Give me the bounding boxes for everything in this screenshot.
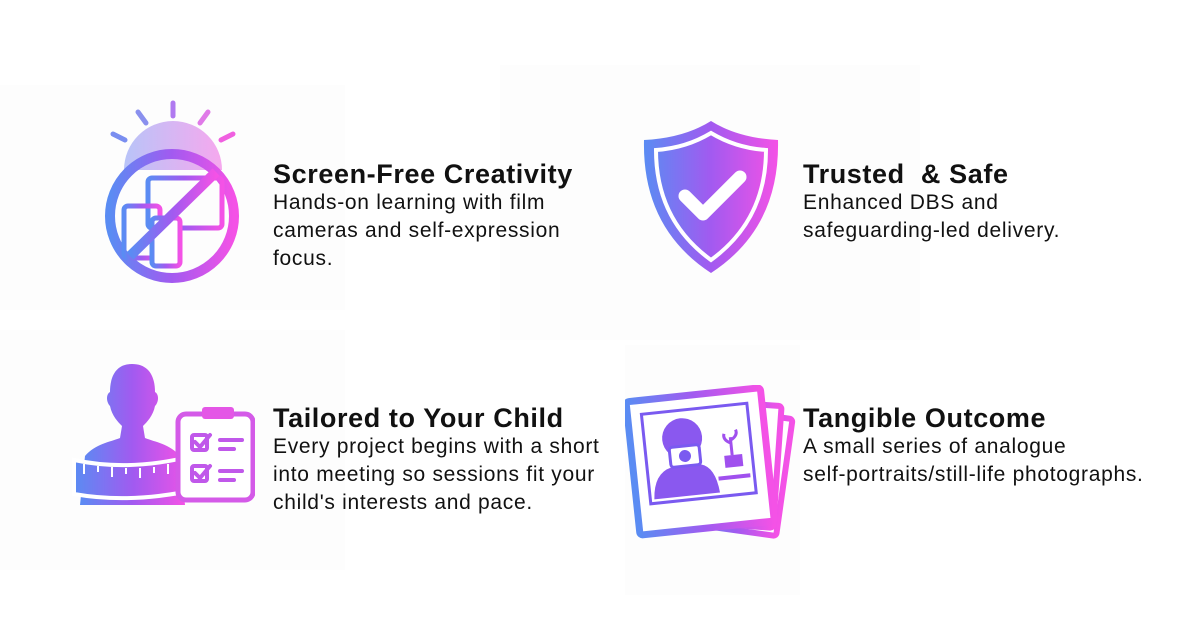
text: trusted: Enhanced DBS and	[803, 191, 999, 214]
text: tailored: child's interests and pace.	[273, 491, 533, 514]
text: tailored: Every project begins with a short	[273, 435, 600, 458]
text: trusted	[803, 191, 1060, 242]
text: trusted: safeguarding-led delivery.	[803, 219, 1060, 242]
icon: shield	[644, 121, 778, 273]
text: screen-free	[273, 191, 560, 270]
text: screen-free: Hands-on learning with film	[273, 191, 545, 214]
text: screen-free: cameras and self-expression	[273, 219, 560, 242]
heading: tangible: Tangible Outcome	[803, 403, 1046, 433]
text: tailored	[273, 435, 600, 514]
icon: child measure and clipboard	[76, 364, 255, 505]
heading: tailored: Tailored to Your Child	[273, 403, 564, 433]
text: tailored: into meeting so sessions fit your	[273, 463, 595, 486]
heading: trusted: Trusted & Safe	[803, 159, 1009, 189]
text: tangible: self-portraits/still-life photographs.	[803, 463, 1144, 486]
icon: no screens	[105, 100, 239, 283]
icon: photographs	[625, 385, 796, 539]
text: tangible	[803, 435, 1144, 486]
heading: screen-free: Screen-Free Creativity	[273, 159, 573, 189]
text: tangible: A small series of analogue	[803, 435, 1066, 458]
text: screen-free: focus.	[273, 247, 333, 270]
